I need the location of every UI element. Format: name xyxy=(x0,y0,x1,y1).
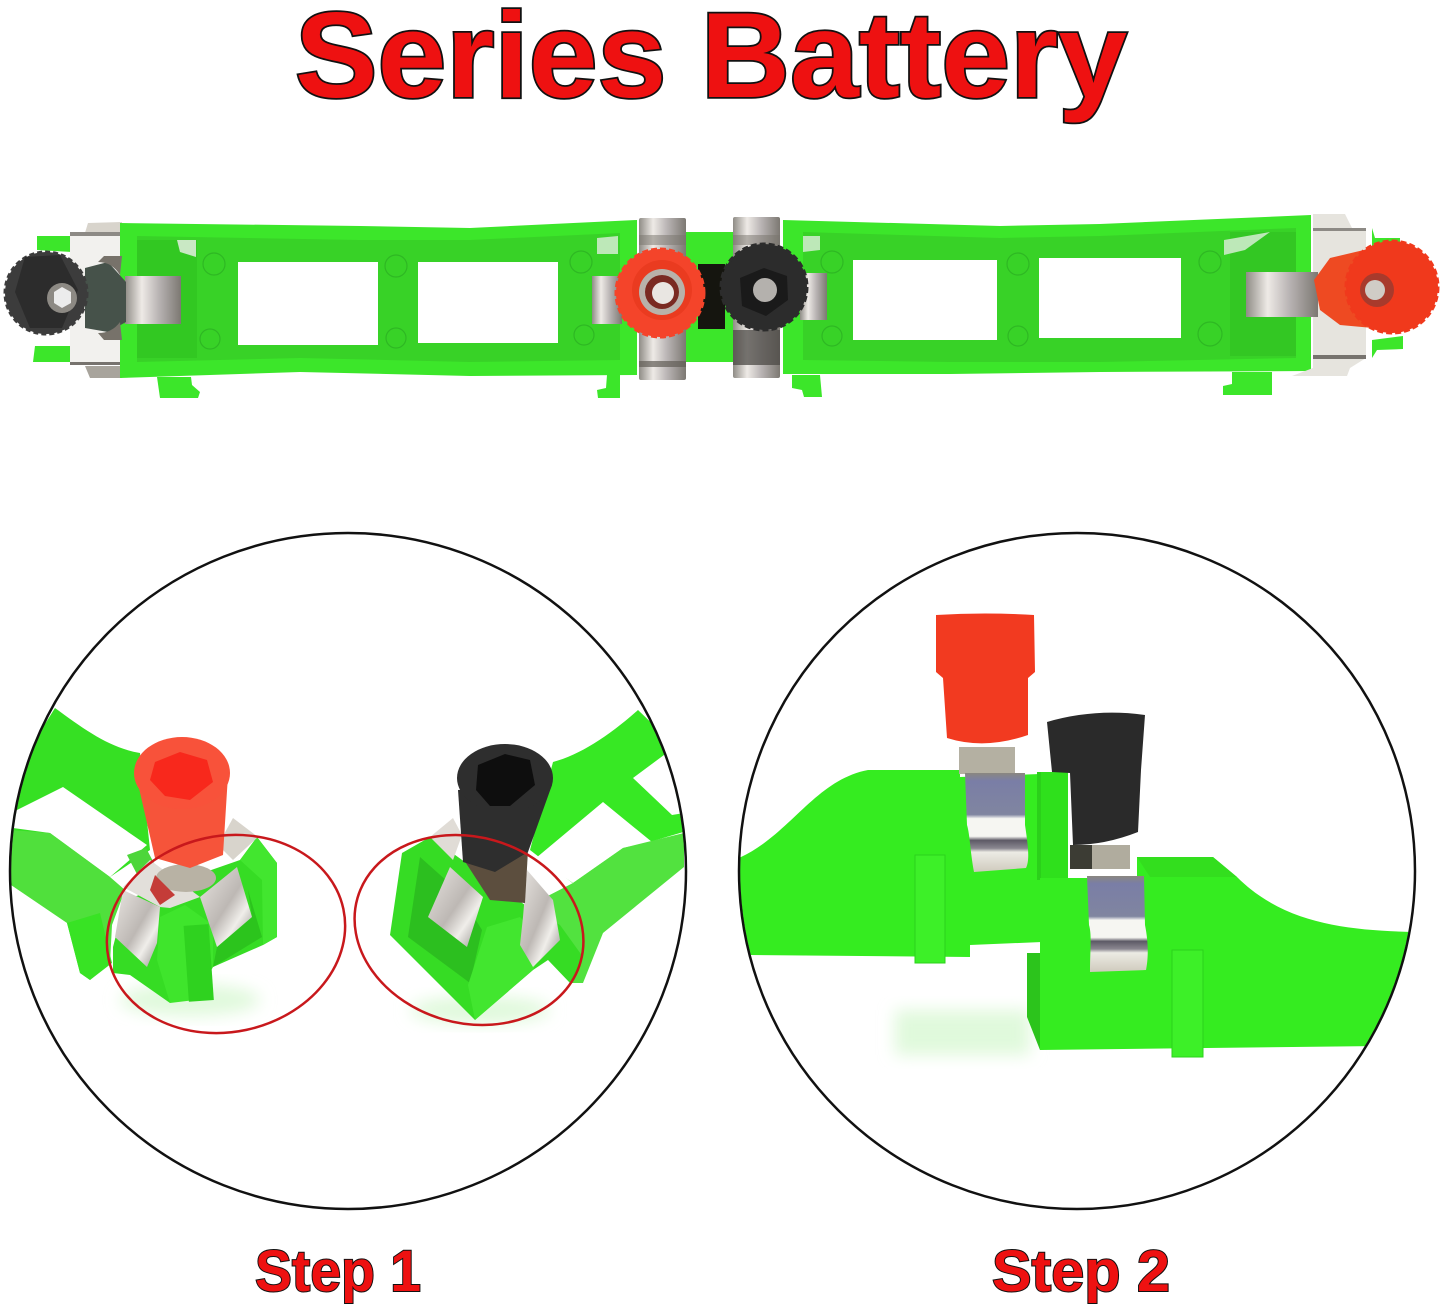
center connector xyxy=(592,217,780,380)
soft shadow xyxy=(895,1010,1030,1055)
black terminal center xyxy=(721,244,807,330)
left terminal block xyxy=(113,818,277,1003)
highlight ellipse right xyxy=(332,809,606,1051)
green holder left piece xyxy=(739,770,1068,957)
panel: step 1 detail xyxy=(10,533,690,1209)
green holder left arm xyxy=(10,708,150,980)
step 1 label: Step 1 xyxy=(255,1239,421,1304)
battery holder windows xyxy=(238,262,378,345)
left block edge xyxy=(1040,772,1068,878)
step 2 circle outline xyxy=(739,533,1415,1209)
black cap xyxy=(1047,713,1145,845)
right rib xyxy=(1172,950,1203,1057)
holder feet xyxy=(157,377,200,398)
red cap xyxy=(936,614,1035,743)
panel: step 2 detail xyxy=(739,533,1415,1209)
metal clips xyxy=(223,818,258,860)
right clip xyxy=(1070,845,1148,972)
black cap xyxy=(457,744,553,872)
metal clips xyxy=(430,818,462,860)
inner spring clip xyxy=(800,273,827,320)
red cap xyxy=(134,737,230,868)
red terminal center xyxy=(616,249,704,337)
highlight ellipse left xyxy=(88,813,364,1055)
battery holder windows xyxy=(853,260,997,340)
green holder right piece xyxy=(1040,857,1412,1050)
right terminal block xyxy=(390,818,583,1020)
step 1 circle outline xyxy=(10,533,686,1209)
window frame shading and dimples xyxy=(200,251,594,349)
left metal clip xyxy=(70,222,122,378)
holder feet xyxy=(792,375,822,397)
right end tab and clip xyxy=(1246,214,1403,376)
left end tabs xyxy=(33,236,72,362)
red terminal right xyxy=(1314,241,1438,333)
step 2 label: Step 2 xyxy=(992,1239,1170,1304)
right battery holder xyxy=(783,215,1311,397)
left clip xyxy=(959,747,1028,872)
panel: series battery holder assembly xyxy=(5,214,1438,398)
left rib xyxy=(915,855,945,963)
soft block shadows xyxy=(120,984,260,1016)
left battery holder xyxy=(120,220,637,398)
green holder right arm xyxy=(530,710,690,983)
black terminal left xyxy=(5,252,126,340)
left spring clip xyxy=(125,276,181,324)
